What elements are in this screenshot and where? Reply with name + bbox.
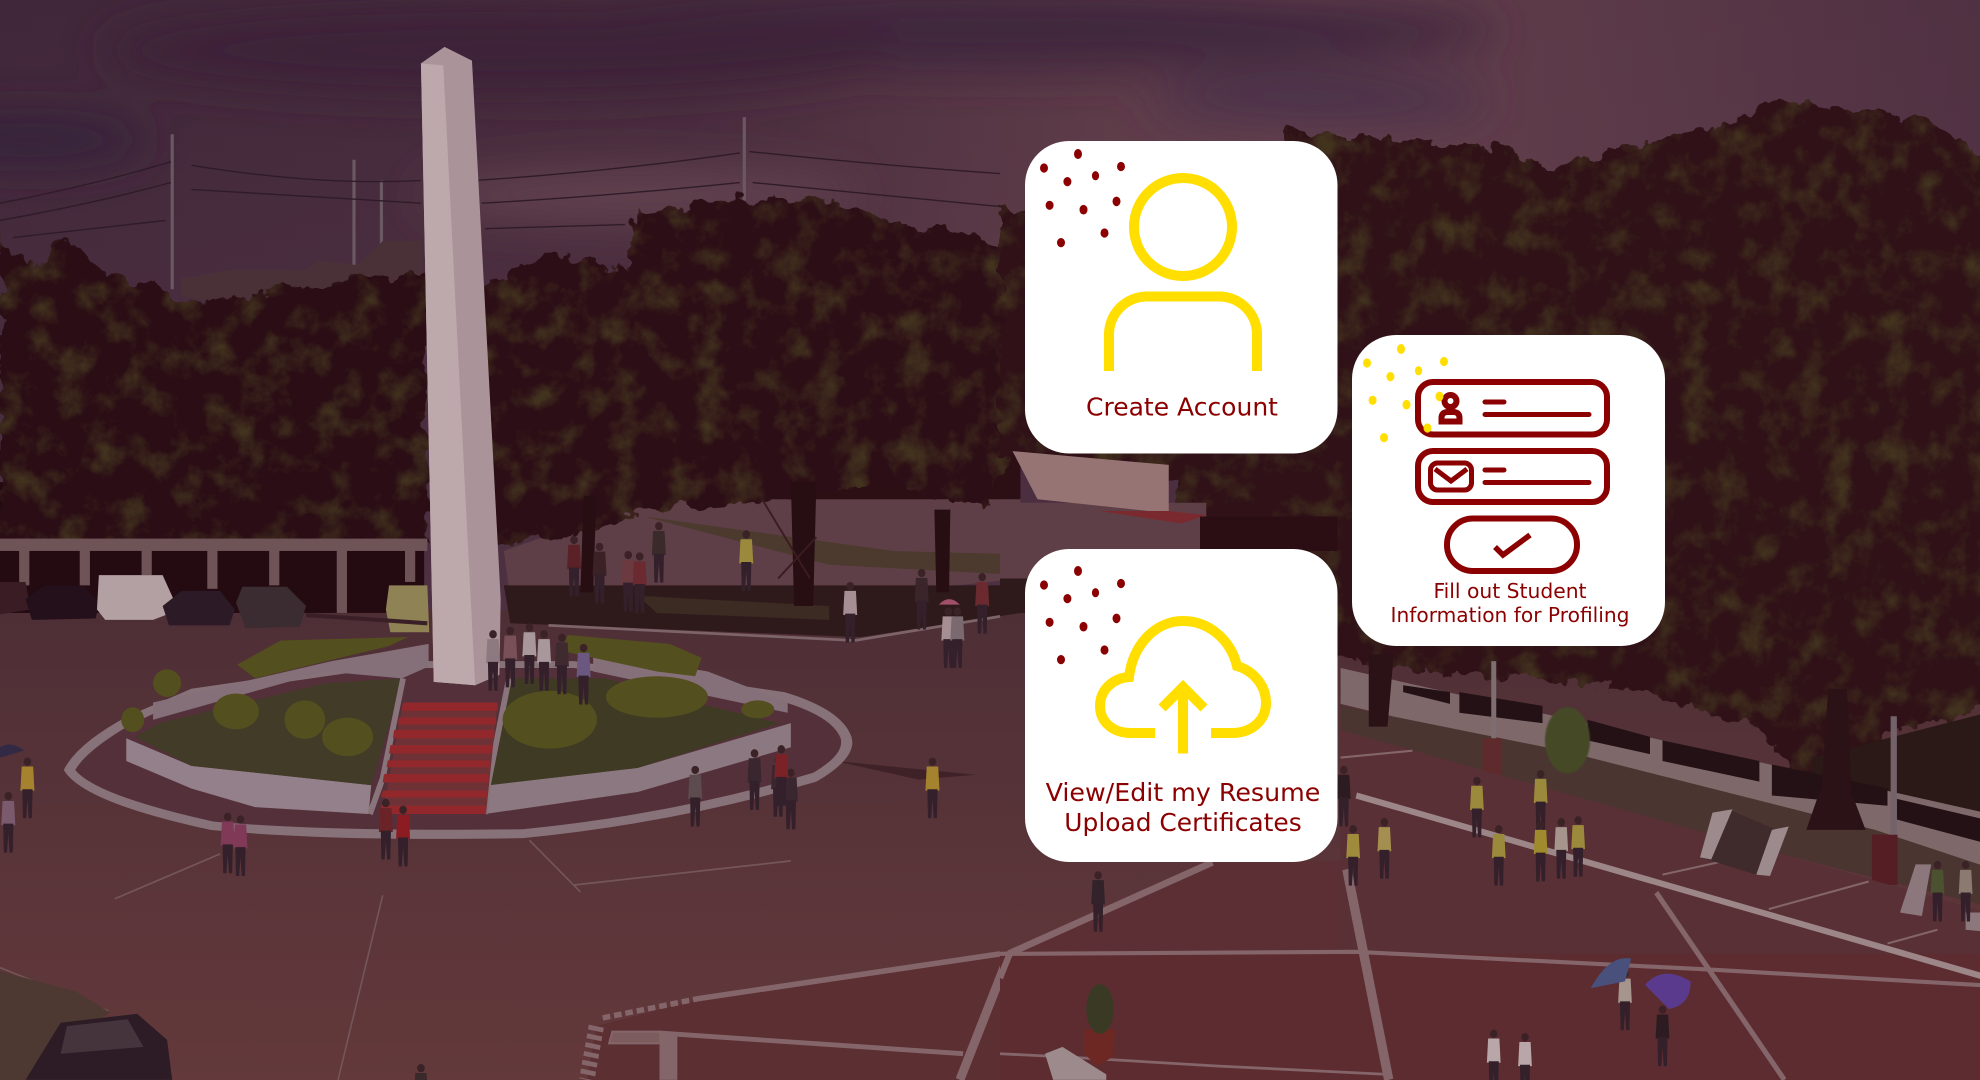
- walls: [126, 738, 371, 814]
- decorative dots: maroon: [1040, 566, 1125, 664]
- benches: [1700, 809, 1784, 875]
- people: [486, 630, 500, 691]
- pergola: [0, 539, 427, 613]
- panel: create account: [1025, 141, 1338, 454]
- icon: person: [1109, 178, 1257, 371]
- obelisk: [421, 47, 501, 685]
- ground lines: [0, 840, 791, 1080]
- panel: view/edit resume: Upload Certificates: [1064, 808, 1302, 837]
- grass: [135, 678, 403, 785]
- decorative dots: yellow: [1363, 344, 1448, 442]
- icon: profile form: [1418, 382, 1607, 571]
- paved: [1341, 730, 1980, 1080]
- trunks and posts: [1369, 654, 1866, 830]
- grass strip: [1341, 706, 1980, 909]
- shrubs: [121, 635, 774, 756]
- planter ring: [64, 661, 852, 839]
- rear walls: [153, 644, 429, 720]
- right half, zoom coordinates: [1000, 100, 1980, 1080]
- label: fill out student information: Fill out Student: [1433, 579, 1587, 603]
- label: create account: Create Account: [1086, 392, 1278, 422]
- panel: fill out student information: [1352, 335, 1665, 646]
- trunks: [580, 482, 950, 606]
- panel: view/edit resume: [1025, 549, 1338, 862]
- label: view/edit resume, upload certificates: View/Edit my Resume: [1046, 778, 1320, 807]
- canopies right: [1000, 100, 1980, 813]
- left half, zoom coordinates: [0, 47, 1020, 1080]
- stairs: [383, 702, 497, 814]
- cars: [0, 575, 429, 632]
- panel: fill out student information: Information for Profiling: [1390, 603, 1630, 627]
- students: [1470, 777, 1484, 837]
- potted plant: [1084, 1030, 1116, 1066]
- icon: cloud upload: [1100, 621, 1266, 754]
- canopies: [478, 200, 1020, 544]
- dark band behind pergola: [0, 482, 424, 613]
- plaza ground: [0, 610, 1980, 1080]
- courtyard: [504, 499, 1020, 599]
- paved: [587, 954, 1000, 1080]
- decorative dots: maroon: [1040, 149, 1125, 247]
- lawn behind fence: [1812, 709, 1980, 854]
- fence: [1341, 668, 1980, 871]
